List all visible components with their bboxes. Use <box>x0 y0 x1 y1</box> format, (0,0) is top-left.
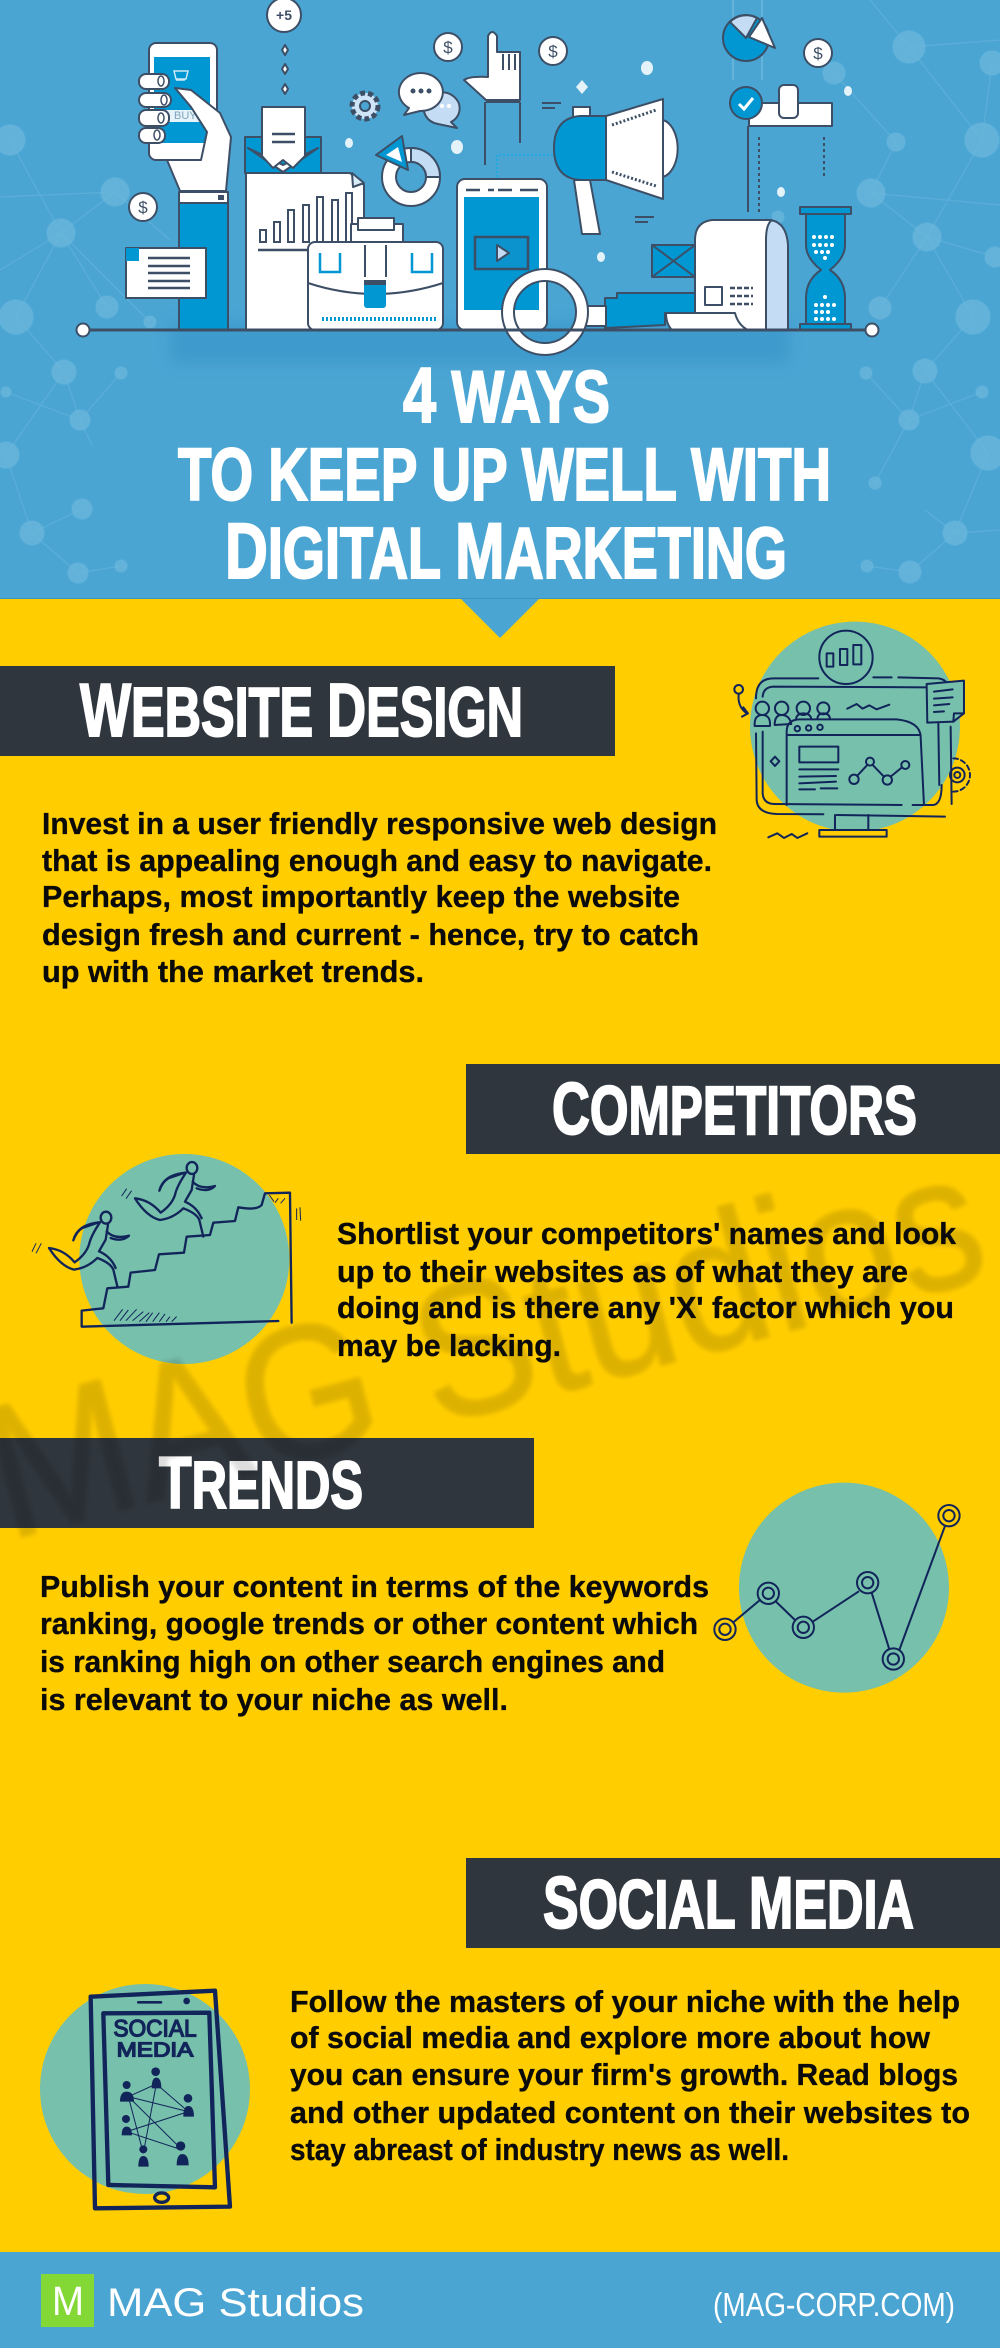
icon: gear <box>352 93 378 119</box>
heading: trends: TRENDS <box>159 1443 363 1524</box>
icon: magnifying glass <box>502 269 695 355</box>
text: trends <box>40 1569 709 1717</box>
pointer triangle <box>461 599 539 638</box>
text: website design: design fresh and current - hence, try to catch <box>42 917 699 952</box>
website url: (MAG-CORP.COM) <box>713 2286 955 2323</box>
dotted connector <box>497 155 553 197</box>
icon: dollar coins: $ <box>548 42 558 61</box>
icon: dollar coins <box>129 33 832 221</box>
icon: dollar coins: $ <box>138 198 148 217</box>
text: competitors: may be lacking. <box>337 1328 561 1363</box>
icon: envelope with letter <box>245 107 321 173</box>
icon: megaphone <box>542 99 678 234</box>
icon: video phone <box>457 179 547 330</box>
brand name: MAG Studios <box>107 2281 364 2325</box>
icon: chat bubbles <box>399 73 460 128</box>
icon: dollar coins: $ <box>813 44 823 63</box>
icon: donut chart and pointer <box>376 136 440 206</box>
ground line <box>76 324 878 336</box>
icon: briefcase <box>308 218 443 330</box>
panel: header <box>0 0 1000 599</box>
text: website design: that is appealing enough and easy to navigate. <box>42 843 712 878</box>
text: competitors: doing and is there any 'X' factor which you <box>337 1290 954 1325</box>
icon: check slider <box>730 85 832 212</box>
icon: social media phone <box>40 1984 250 2208</box>
icon: competitors stairs <box>32 1154 301 1364</box>
heading: social media: SOCIAL MEDIA <box>543 1863 914 1944</box>
icon: scroll document <box>652 220 788 330</box>
text: trends: is ranking high on other search engines and <box>40 1644 665 1679</box>
text: competitors: Shortlist your competitors' names and look <box>337 1216 957 1251</box>
icon: plus five badge <box>267 0 301 94</box>
title: DIGITAL MARKETING <box>225 506 787 595</box>
logo mark: M <box>52 2278 84 2324</box>
handwritten label: MEDIA <box>117 2039 194 2062</box>
icon: pie chart <box>723 0 775 80</box>
white sparkles <box>345 61 852 262</box>
text: competitors <box>337 1216 957 1363</box>
text: website design <box>42 806 717 989</box>
panel: footer <box>0 2252 1000 2348</box>
icon: pointing hand <box>464 32 520 165</box>
icon: sleeve and hand holding phone <box>139 43 231 330</box>
title: 4 WAYS <box>403 351 610 439</box>
handwritten label: SOCIAL <box>113 2016 197 2043</box>
icon: plus five badge: +5 <box>276 7 292 23</box>
text: social media: Follow the masters of your niche with the help <box>290 1984 960 2019</box>
text: trends: is relevant to your niche as well. <box>40 1682 508 1717</box>
icon: sleeve and hand holding phone: BUY <box>174 110 197 122</box>
icon: hourglass <box>800 207 851 330</box>
text: social media: and other updated content on their websites to <box>290 2095 970 2130</box>
heading: website design: WEBSITE DESIGN <box>80 668 523 752</box>
network of people <box>120 2067 194 2167</box>
icon: report document with bars <box>246 173 364 330</box>
text: website design: Invest in a user friendly responsive web design <box>42 806 717 841</box>
handwritten label <box>113 2016 197 2062</box>
text: social media: of social media and explore more about how <box>290 2020 931 2055</box>
icon: trends line chart <box>714 1483 960 1693</box>
text: trends: ranking, google trends or other content which <box>40 1606 698 1641</box>
text: website design: Perhaps, most importantly keep the website <box>42 879 680 914</box>
icon: small note card <box>126 248 206 298</box>
text: trends: Publish your content in terms of the keywords <box>40 1569 709 1604</box>
text: social media: stay abreast of industry news as well. <box>290 2132 789 2167</box>
text: social media: you can ensure your firm's growth. Read blogs <box>290 2057 958 2092</box>
text: social media <box>290 1984 970 2167</box>
heading: trends <box>0 1438 534 1528</box>
text: competitors: up to their websites as of what they are <box>337 1254 908 1289</box>
heading: social media <box>466 1858 1000 1948</box>
header illustration <box>76 0 878 355</box>
icon: website design <box>734 622 970 838</box>
text: website design: up with the market trends. <box>42 954 424 989</box>
title <box>178 351 831 595</box>
logo mark <box>41 2274 94 2327</box>
icon: dollar coins: $ <box>443 38 453 57</box>
